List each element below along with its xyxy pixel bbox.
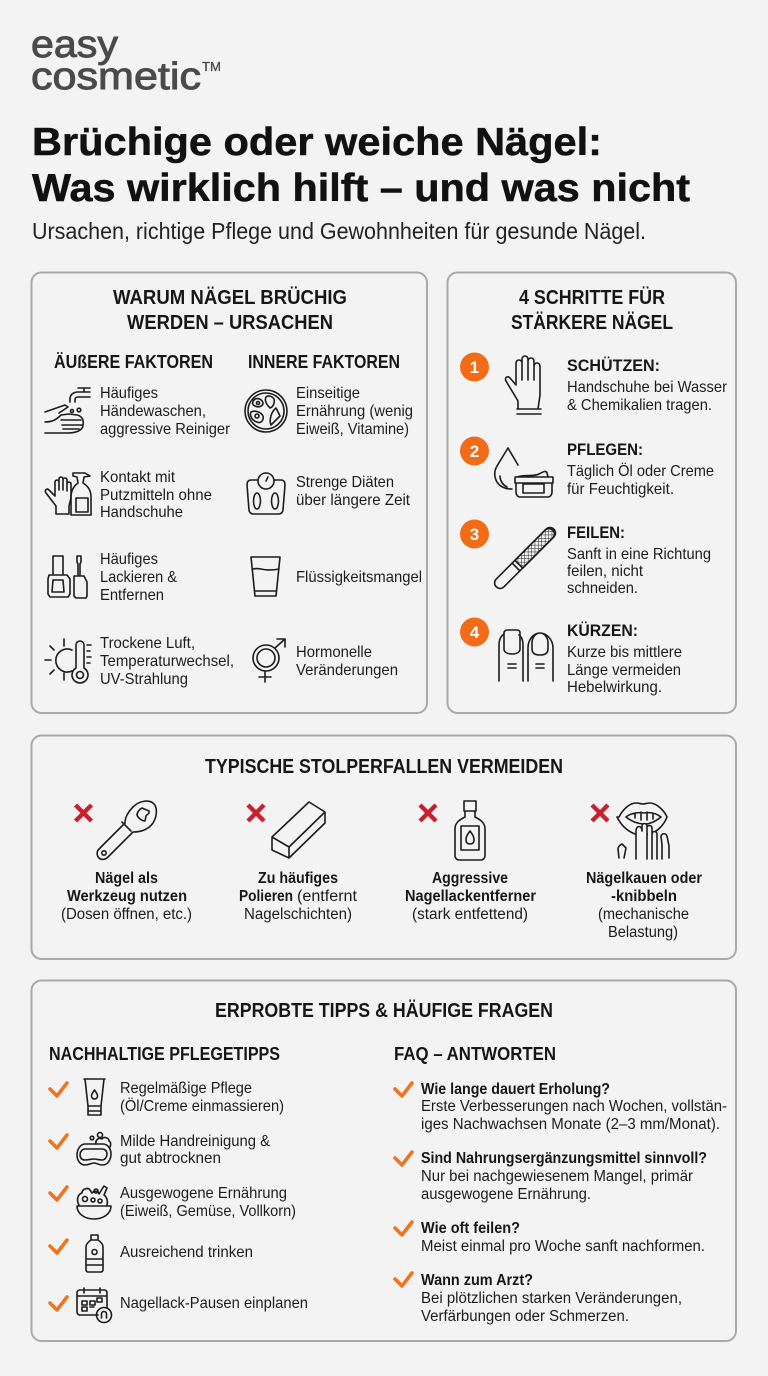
text: frequent polishing: Entfernen: [100, 587, 164, 604]
icon: soap: [77, 1132, 111, 1165]
check faq 3: [395, 1222, 412, 1235]
text: mild cleaning: Milde Handreinigung &: [120, 1133, 270, 1150]
text: step protect: [567, 356, 728, 414]
step badge 1: 1: [470, 358, 479, 377]
subheading: internal factors: INNERE FAKTOREN: [248, 352, 400, 372]
text: step care: für Feuchtigkeit.: [567, 481, 674, 498]
text: strict diets: über längere Zeit: [296, 492, 411, 509]
text: step care: [567, 440, 714, 498]
text: balanced diet: Ausgewogene Ernährung: [120, 1185, 287, 1202]
text: aggressive remover: Nagellackentferner: [405, 888, 536, 905]
text: strict diets: Strenge Diäten: [296, 474, 394, 491]
icon: plate of food: [245, 390, 287, 432]
text: frequent hand washing: Häufiges: [100, 385, 158, 402]
text: nail biting: (mechanische: [598, 906, 689, 923]
text: step protect: SCHÜTZEN:: [567, 356, 660, 375]
icon: gender symbol: [253, 639, 285, 682]
faq: recovery: Wie lange dauert Erholung?: [421, 1081, 610, 1098]
text: aggressive remover: Aggressive: [432, 870, 508, 887]
faq: supplements: Nur bei nachgewiesenem Mangel, primär: [421, 1168, 693, 1185]
text: lack of fluids: Flüssigkeitsmangel: [296, 569, 422, 586]
logo: easy cosmetic: [31, 24, 221, 98]
faq: supplements: Sind Nahrungsergänzungsmittel sinnvoll?: [421, 1150, 707, 1167]
subheading: faq: FAQ – ANTWORTEN: [394, 1044, 556, 1064]
text: step care: PFLEGEN:: [567, 440, 643, 459]
check 4: [50, 1240, 67, 1253]
text: one-sided diet: Ernährung (wenig: [296, 403, 413, 420]
check 1: [50, 1083, 67, 1096]
text: too much polishing: (entfernt: [297, 888, 358, 905]
logo: easy cosmetic: cosmetic: [31, 56, 201, 98]
text: nails as tools: Werkzeug nutzen: [67, 888, 187, 905]
text: dry air: Temperaturwechsel,: [100, 653, 234, 670]
text: one-sided diet: Eiweiß, Vitamine): [296, 421, 409, 438]
icon: bottle opener: [97, 801, 156, 859]
faq: recovery: Erste Verbesserungen nach Wochen, vollstän-: [421, 1098, 727, 1115]
text: dry air: Trockene Luft,: [100, 635, 195, 652]
text: step file: FEILEN:: [567, 523, 625, 542]
text: step care: Täglich Öl oder Creme: [567, 462, 714, 480]
icon: sun and thermometer: [45, 639, 91, 683]
icon: nail file: [492, 525, 558, 591]
heading: four steps: [511, 286, 673, 334]
heading: tips and faq: ERPROBTE TIPPS & HÄUFIGE FRAGEN: [215, 999, 553, 1022]
text: hormonal changes: Veränderungen: [296, 662, 398, 679]
cross mark 3: [420, 805, 436, 821]
text: one-sided diet: [296, 385, 413, 438]
text: dry air: UV-Strahlung: [100, 671, 188, 688]
text: contact with cleaning agents: [100, 469, 212, 521]
text: frequent polishing: Häufiges: [100, 551, 158, 568]
panel: tips and faq: [32, 980, 736, 1341]
text: too much polishing: Polieren: [239, 888, 293, 905]
faq: how often to file: Meist einmal pro Woche sanft nachformen.: [421, 1238, 705, 1255]
title: Was wirklich hilft – und was nicht: [32, 167, 690, 210]
title: [32, 121, 690, 210]
icon: salad bowl: [77, 1186, 111, 1219]
faq: how often to file: [421, 1220, 705, 1255]
text: too much polishing: [239, 870, 358, 923]
check faq 4: [395, 1273, 412, 1286]
text: nails as tools: (Dosen öffnen, etc.): [61, 906, 192, 923]
heading: four steps: STÄRKERE NÄGEL: [511, 311, 673, 334]
icon: oil drop and cream jar: [495, 448, 553, 497]
text: contact with cleaning agents: Kontakt mit: [100, 469, 176, 486]
heading: causes: WERDEN – URSACHEN: [127, 312, 333, 334]
step badge 1: [460, 352, 489, 382]
text: step protect: & Chemikalien tragen.: [567, 397, 712, 414]
text: strict diets: [296, 474, 411, 509]
icon: cream tube: [84, 1079, 105, 1115]
title: Brüchige oder weiche Nägel:: [32, 121, 602, 164]
step badge 4: 4: [470, 623, 480, 642]
text: step file: Sanft in eine Richtung: [567, 546, 711, 563]
step badge 2: 2: [470, 442, 479, 461]
faq: see a doctor: [421, 1272, 682, 1325]
faq: see a doctor: Wann zum Arzt?: [421, 1272, 533, 1289]
icon: water bottle: [86, 1235, 103, 1272]
cross mark 4: [592, 805, 608, 821]
heading: four steps: 4 SCHRITTE FÜR: [519, 286, 665, 309]
heading: causes: [113, 286, 347, 334]
text: contact with cleaning agents: Handschuhe: [100, 504, 183, 521]
text: hormonal changes: [296, 644, 398, 679]
text: step file: feilen, nicht: [567, 563, 644, 580]
faq: how often to file: Wie oft feilen?: [421, 1220, 520, 1237]
text: too much polishing: Zu häufiges: [258, 870, 338, 887]
subheading: external factors: ÄUßERE FAKTOREN: [54, 352, 213, 372]
icon: polishing block: [272, 802, 325, 858]
text: mild cleaning: gut abtrocknen: [120, 1150, 221, 1167]
text: aggressive remover: (stark entfettend): [412, 906, 528, 923]
text: nails as tools: [61, 870, 192, 923]
icon: calendar: [77, 1288, 112, 1322]
heading: causes: WARUM NÄGEL BRÜCHIG: [113, 286, 347, 309]
faq: see a doctor: Verfärbungen oder Schmerzen.: [421, 1308, 629, 1325]
cross mark 2: [248, 805, 264, 821]
panel: causes: [32, 272, 427, 713]
icon: nail polish: [48, 556, 87, 598]
text: frequent hand washing: aggressive Reiniger: [100, 421, 231, 438]
step badge 2: [460, 436, 489, 466]
text: nail biting: Nägelkauen oder: [586, 870, 702, 887]
faq: recovery: [421, 1081, 727, 1133]
text: polish breaks: Nagellack-Pausen einplanen: [120, 1295, 308, 1312]
text: too much polishing: Nagelschichten): [244, 906, 352, 923]
subheading: care tips: NACHHALTIGE PFLEGETIPPS: [49, 1044, 280, 1064]
step badge 3: 3: [470, 525, 479, 544]
text: step file: [567, 523, 711, 597]
icon: hand washing: [45, 388, 90, 433]
logo: easy cosmetic: TM: [202, 59, 221, 74]
text: hormonal changes: Hormonelle: [296, 644, 372, 661]
check faq 1: [395, 1083, 412, 1096]
check 2: [50, 1135, 67, 1148]
text: regular care: Regelmäßige Pflege: [120, 1080, 252, 1097]
text: aggressive remover: [405, 870, 536, 923]
text: one-sided diet: Einseitige: [296, 385, 360, 402]
check 5: [50, 1297, 67, 1310]
text: step shorten: [567, 621, 682, 696]
text: frequent hand washing: [100, 385, 231, 438]
step badge 3: [460, 520, 489, 548]
logo: easy cosmetic: easy: [31, 24, 118, 66]
icon: nail biting: [617, 803, 669, 859]
text: step shorten: Kurze bis mittlere: [567, 644, 682, 661]
faq: supplements: ausgewogene Ernährung.: [421, 1186, 591, 1203]
text: step file: schneiden.: [567, 580, 638, 597]
text: regular care: (Öl/Creme einmassieren): [120, 1097, 284, 1115]
cross mark 1: [76, 805, 92, 821]
text: drink enough: Ausreichend trinken: [120, 1244, 253, 1261]
text: balanced diet: (Eiweiß, Gemüse, Vollkorn): [120, 1203, 296, 1220]
check 3: [50, 1187, 67, 1200]
text: nails as tools: Nägel als: [95, 870, 158, 887]
icon: glove: [505, 356, 541, 414]
text: nail biting: [586, 870, 702, 941]
faq: see a doctor: Bei plötzlichen starken Veränderungen,: [421, 1290, 682, 1307]
icon: bathroom scale: [247, 473, 285, 514]
text: step shorten: KÜRZEN:: [567, 621, 638, 640]
panel: pitfalls: [32, 736, 736, 959]
text: frequent polishing: Lackieren &: [100, 569, 177, 586]
icon: glass of water: [251, 557, 280, 596]
icon: remover bottle: [455, 801, 485, 860]
text: frequent polishing: [100, 551, 177, 604]
text: contact with cleaning agents: Putzmitteln ohne: [100, 487, 212, 504]
text: dry air: [100, 635, 234, 688]
text: mild cleaning: [120, 1133, 270, 1167]
text: step protect: Handschuhe bei Wasser: [567, 379, 728, 396]
faq: recovery: iges Nachwachsen Monate (2–3 mm/Monat).: [421, 1116, 720, 1133]
step badge 4: [460, 618, 489, 646]
text: step shorten: Länge vermeiden: [567, 662, 681, 679]
panel: four steps: [448, 272, 736, 713]
text: step shorten: Hebelwirkung.: [567, 679, 662, 696]
icon: glove and spray bottle: [45, 473, 91, 515]
subtitle: Ursachen, richtige Pflege und Gewohnheiten für gesunde Nägel.: [32, 218, 646, 244]
faq: supplements: [421, 1150, 707, 1203]
heading: pitfalls: TYPISCHE STOLPERFALLEN VERMEIDEN: [205, 756, 563, 778]
text: balanced diet: [120, 1185, 296, 1220]
check faq 2: [395, 1152, 412, 1165]
text: regular care: [120, 1080, 284, 1115]
text: nail biting: Belastung): [608, 924, 678, 941]
text: nail biting: -knibbeln: [611, 888, 677, 905]
text: frequent hand washing: Händewaschen,: [100, 403, 206, 420]
icon: two fingers with nails: [499, 630, 553, 681]
